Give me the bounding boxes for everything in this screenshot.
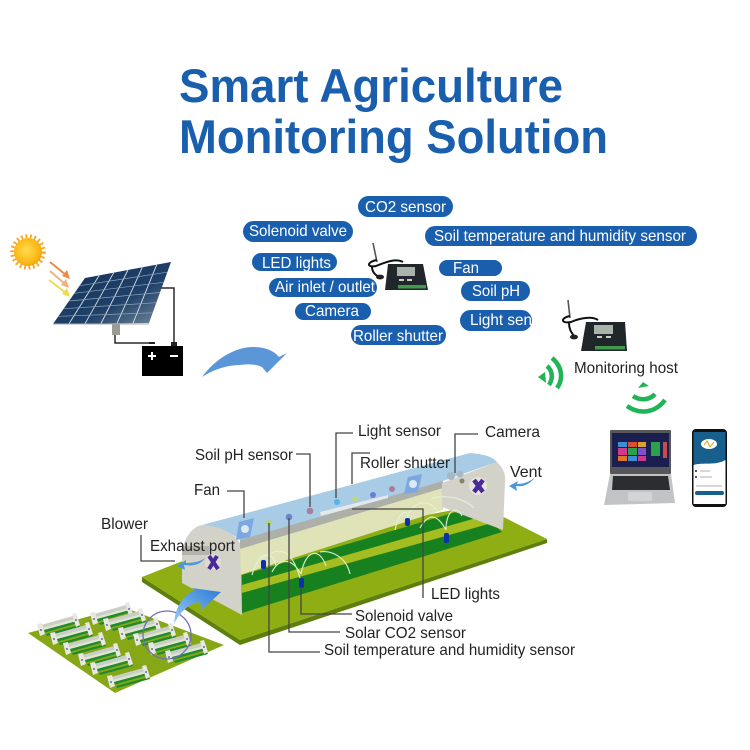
pill: fan: Fan bbox=[453, 260, 479, 277]
front end wall bbox=[182, 525, 242, 615]
icon: fan panel left bbox=[236, 518, 254, 540]
icon: wifi signal right bbox=[627, 382, 665, 412]
solar modules bbox=[53, 262, 171, 324]
label: light sensor: Light sensor bbox=[358, 423, 441, 440]
label: soil pH sensor: Soil pH sensor bbox=[195, 447, 293, 464]
icon: sun bbox=[12, 236, 44, 268]
pill: fan bbox=[439, 260, 502, 277]
icon: solar panel with battery bbox=[53, 262, 183, 376]
LED light bar bbox=[320, 495, 388, 516]
pill: soil pH: Soil pH bbox=[472, 283, 520, 300]
pill: camera: Camera bbox=[305, 303, 359, 320]
panel post bbox=[112, 324, 120, 335]
highlight circle bbox=[143, 611, 191, 659]
pill labels: controlled devices bbox=[243, 196, 697, 345]
pill: LED lights: LED lights bbox=[262, 255, 331, 272]
arrow: field to greenhouse bbox=[174, 588, 221, 624]
greenhouse labels bbox=[101, 423, 575, 659]
pill: roller shutter: Roller shutter bbox=[353, 328, 443, 345]
pill: soil temperature and humidity sensor: Soil temperature and humidity sensor bbox=[434, 228, 686, 245]
icon: smartphone app bbox=[692, 429, 727, 507]
title bbox=[179, 59, 608, 163]
pill: light sensor (clipped): Light sen bbox=[470, 312, 532, 329]
label: roller shutter: Roller shutter bbox=[360, 455, 450, 472]
leader lines bbox=[141, 433, 478, 652]
pill: air inlet / outlet: Air inlet / outlet bbox=[275, 279, 376, 296]
icon: controller with antenna (centre) bbox=[369, 243, 428, 290]
label: solenoid valve: Solenoid valve bbox=[355, 608, 453, 625]
sensor dots bbox=[266, 486, 395, 526]
lower roof band bbox=[240, 480, 443, 549]
title: Smart Agriculture bbox=[179, 59, 563, 112]
arrow: solar power to controller bbox=[202, 347, 287, 377]
icon: wifi signal left bbox=[538, 358, 561, 388]
label: LED lights: LED lights bbox=[431, 586, 500, 603]
pill: CO2 sensor: CO2 sensor bbox=[365, 199, 446, 216]
icon: controller with antenna (monitoring host) bbox=[563, 300, 627, 351]
sprinkler valves bbox=[261, 518, 449, 588]
label: solar CO2 sensor: Solar CO2 sensor bbox=[345, 625, 466, 642]
label: blower: Blower bbox=[101, 516, 148, 533]
battery bbox=[142, 342, 183, 376]
label: exhaust port: Exhaust port bbox=[150, 538, 236, 555]
icon: fan panel right bbox=[404, 474, 422, 494]
pill: light sensor (clipped) bbox=[460, 310, 532, 331]
sprinkler sprays bbox=[252, 497, 474, 578]
interior floor rows bbox=[240, 483, 502, 613]
pill: soil pH bbox=[461, 281, 530, 301]
icon: field of small greenhouses bbox=[28, 602, 224, 693]
label: fan: Fan bbox=[194, 482, 220, 499]
label: camera: Camera bbox=[485, 424, 540, 441]
arrow: vent airflow bbox=[509, 477, 535, 491]
arrow: exhaust airflow bbox=[177, 558, 205, 570]
ground plate bbox=[142, 505, 547, 645]
label: monitoring host: Monitoring host bbox=[574, 360, 679, 377]
rear end wall bbox=[442, 462, 505, 530]
wiring bbox=[115, 288, 174, 343]
icon: fan left bbox=[205, 554, 221, 570]
icon: greenhouse tunnel bbox=[142, 453, 547, 645]
icon: sunlight arrows bbox=[49, 262, 70, 297]
roof bbox=[202, 453, 497, 540]
icon: camera bbox=[447, 470, 464, 484]
pill: solenoid valve: Solenoid valve bbox=[249, 223, 347, 240]
title: Monitoring Solution bbox=[179, 110, 608, 163]
icon: fan right bbox=[469, 477, 487, 495]
faint blurred mark on wall bbox=[182, 546, 209, 555]
label: vent: Vent bbox=[510, 464, 543, 481]
icon: laptop bbox=[604, 430, 675, 505]
label: soil temperature and humidity sensor: Soil temperature and humidity sensor bbox=[324, 642, 575, 659]
